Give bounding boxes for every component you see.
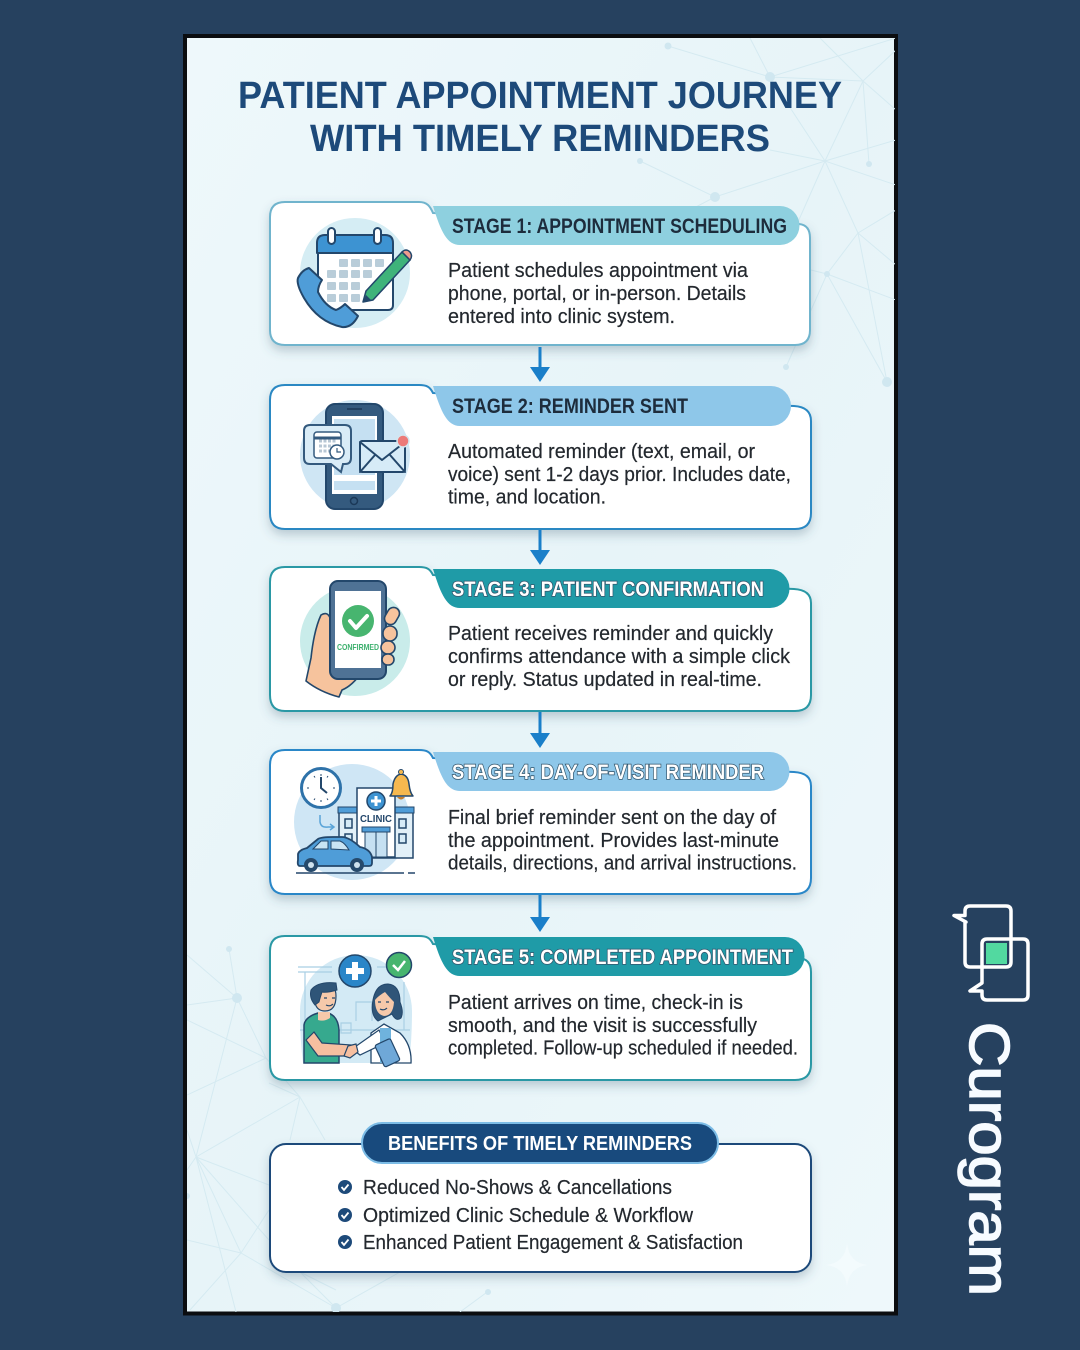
stage 1 heading <box>433 206 800 245</box>
brand wordmark: Curogram <box>957 1022 1021 1296</box>
stage 1 description: phone, portal, or in-person. Details <box>448 283 746 305</box>
stage 3 heading <box>433 569 790 608</box>
panel: stage 5 <box>270 936 811 1080</box>
benefit: patient engagement: Enhanced Patient Engagement & Satisfaction <box>363 1232 743 1254</box>
stage 5 description: Patient arrives on time, check-in is <box>448 992 743 1014</box>
title: WITH TIMELY REMINDERS <box>310 118 770 160</box>
stage 4 heading <box>433 752 790 791</box>
stage 1 description: Patient schedules appointment via <box>448 260 749 282</box>
stage 2 description <box>448 441 791 508</box>
panel: benefits <box>270 1123 811 1272</box>
stage 5 description: smooth, and the visit is successfully <box>448 1015 757 1037</box>
arrow: stage 4 to 5 <box>530 895 550 932</box>
stage 4 description <box>448 807 797 874</box>
benefit: optimized schedule: Optimized Clinic Schedule & Workflow <box>363 1205 694 1227</box>
stage 2 heading <box>433 386 791 426</box>
panel: stage 2 <box>270 385 811 529</box>
icon: patient and doctor handshake <box>298 952 412 1067</box>
stage 3 heading: STAGE 3: PATIENT CONFIRMATION <box>452 578 764 601</box>
stage 2 description: time, and location. <box>448 486 606 508</box>
icon: clock, clinic, bell and car: CLINIC <box>360 814 392 825</box>
stage 4 description: the appointment. Provides last-minute <box>448 830 779 852</box>
benefits heading: BENEFITS OF TIMELY REMINDERS <box>388 1133 692 1155</box>
title <box>238 75 842 160</box>
benefits heading <box>362 1123 718 1163</box>
stage 4 heading: STAGE 4: DAY-OF-VISIT REMINDER <box>452 761 764 784</box>
arrow: stage 2 to 3 <box>530 530 550 565</box>
stage 2 heading: STAGE 2: REMINDER SENT <box>452 395 688 418</box>
icon: clock, clinic, bell and car <box>294 764 415 880</box>
icon: calendar, phone and pencil <box>298 218 412 328</box>
stage 1 description: entered into clinic system. <box>448 306 675 328</box>
stage 5 heading <box>433 937 805 976</box>
stage 2 description: voice) sent 1-2 days prior. Includes date, <box>448 464 791 486</box>
panel: infographic frame <box>185 36 896 1314</box>
arrow: stage 1 to 2 <box>530 347 550 382</box>
stage 5 description <box>448 992 798 1060</box>
benefit: reduced no-shows: Reduced No-Shows & Cancellations <box>363 1177 672 1199</box>
arrow: stage 3 to 4 <box>530 712 550 748</box>
icon: Curogram logo <box>954 906 1028 1000</box>
panel: stage 4 <box>270 750 811 894</box>
stage 5 description: completed. Follow-up scheduled if needed. <box>448 1038 798 1060</box>
stage 3 description <box>448 623 791 691</box>
stage 2 description: Automated reminder (text, email, or <box>448 441 755 463</box>
stage 3 description: Patient receives reminder and quickly <box>448 623 773 645</box>
panel: stage 1 <box>270 202 810 345</box>
icon: hand holding confirmed phone: CONFIRMED <box>337 642 379 652</box>
icon: hand holding confirmed phone <box>300 581 410 697</box>
stage 5 heading: STAGE 5: COMPLETED APPOINTMENT <box>452 946 793 969</box>
stage 1 heading: STAGE 1: APPOINTMENT SCHEDULING <box>452 215 787 238</box>
stage 1 description <box>448 260 749 328</box>
stage 3 description: confirms attendance with a simple click <box>448 646 791 668</box>
title: PATIENT APPOINTMENT JOURNEY <box>238 75 842 117</box>
stage 4 description: details, directions, and arrival instructions. <box>448 852 797 874</box>
icon: phone with calendar and email <box>300 400 410 510</box>
stage 4 description: Final brief reminder sent on the day of <box>448 807 776 829</box>
panel: stage 3 <box>270 567 811 711</box>
stage 3 description: or reply. Status updated in real-time. <box>448 669 762 691</box>
